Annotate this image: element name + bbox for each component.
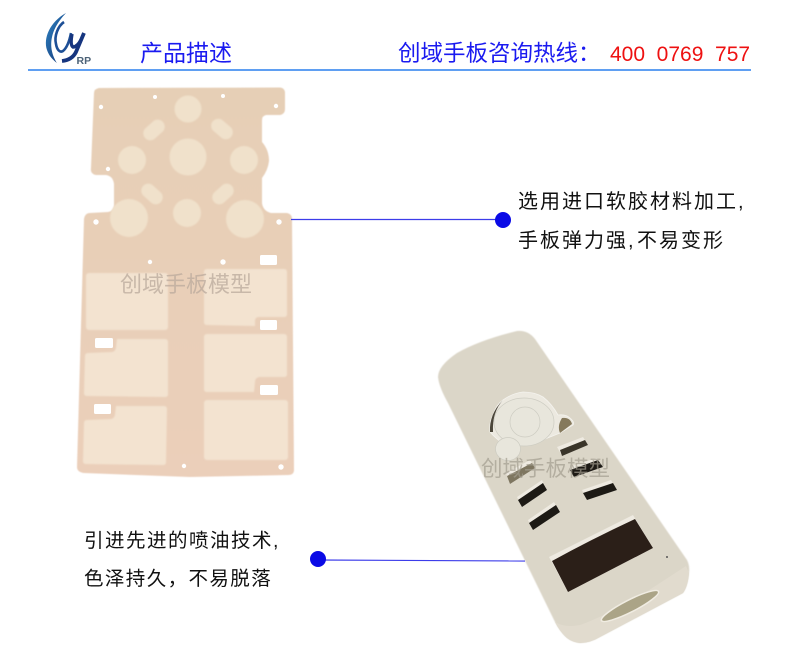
remote body [438,331,689,643]
heading: product description: 产品描述 [140,40,232,66]
remote end slot [599,586,661,626]
hotline: 400 0769 757 [610,43,750,66]
keypad raised round buttons [110,96,264,238]
header rule [28,69,751,71]
callout: spray painting: 色泽持久，不易脱落 [84,568,272,590]
callout: spray painting: 引进先进的喷油技术, [84,530,280,552]
callout: soft silicone [291,190,746,252]
remote dial opening shadow [490,400,503,432]
keypad raised rectangular pads [83,269,288,465]
keypad body [77,88,294,477]
callout: soft silicone: 选用进口软胶材料加工, [518,190,746,213]
keypad holes [93,94,284,470]
callout: soft silicone: 手板弹力强, [518,230,636,252]
remote lower end face [555,566,689,643]
callout: soft silicone: 不易变形 [637,229,725,252]
hotline [398,41,750,66]
remote dial hole [559,418,572,433]
remote watermark: 创域手板模型 [481,457,610,481]
callout: spray painting [84,530,525,590]
remote dial [494,398,554,460]
logo: RP [76,55,91,67]
remote button slots [506,437,617,530]
photo: remote control shell [438,331,689,643]
keypad watermark: 创域手板模型 [120,272,252,297]
hotline: 创域手板咨询热线： [398,41,601,66]
photo: silicone keypad [77,88,294,477]
remote display window [549,515,653,592]
remote dial opening [490,392,574,445]
logo [46,13,91,67]
